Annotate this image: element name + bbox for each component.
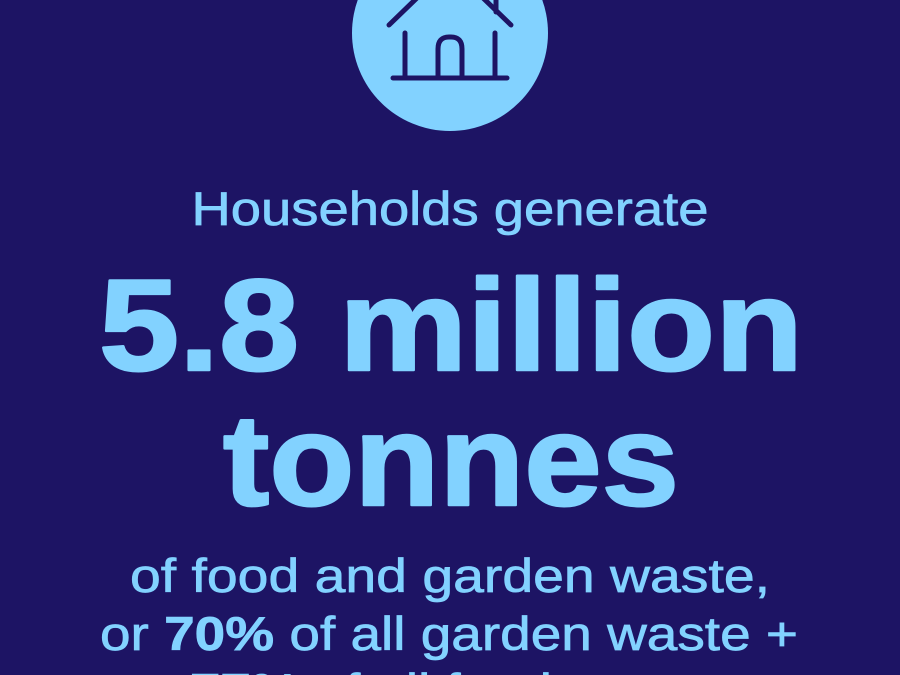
text: 70 percent of garden waste: or 70% of all garden waste + bbox=[100, 607, 798, 660]
text: food and garden waste: of food and garden waste, bbox=[130, 549, 770, 602]
headline: 5.8 million: 5.8 million bbox=[99, 252, 803, 398]
icon: house in circle bbox=[352, 0, 548, 131]
text: intro line: Households generate bbox=[192, 182, 708, 235]
headline: tonnes: tonnes bbox=[223, 387, 679, 533]
